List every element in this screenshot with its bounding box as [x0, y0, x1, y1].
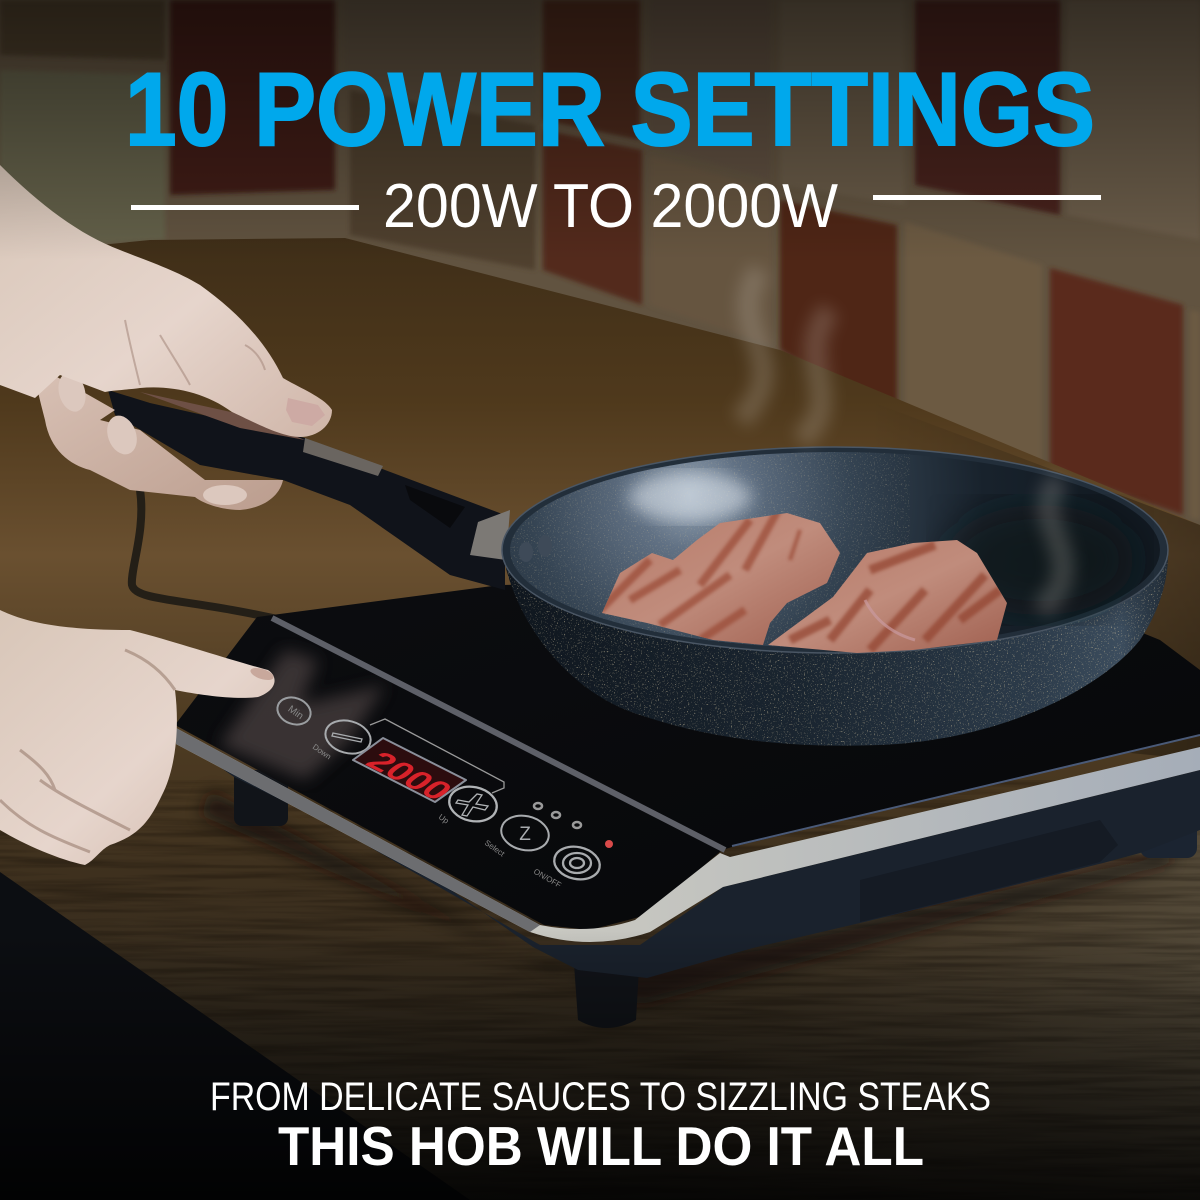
- steam: [740, 270, 1063, 610]
- hob feet: [234, 770, 1197, 1028]
- top shading: [0, 0, 1200, 260]
- pan handle: [108, 390, 510, 590]
- pan rivets: [519, 535, 552, 562]
- on off button: [532, 843, 603, 890]
- pan highlight: [628, 473, 752, 521]
- display bracket: [370, 719, 504, 793]
- up button: Up: [437, 812, 451, 826]
- hob body: [175, 735, 1200, 978]
- right rule: [873, 195, 1101, 200]
- steak pink edge: [865, 600, 915, 640]
- worktop grain: [0, 780, 1200, 1200]
- hob: [175, 575, 1200, 1028]
- title: 10 POWER SETTINGS: [125, 52, 1095, 168]
- left rule: [131, 205, 359, 210]
- indicator lights: [534, 803, 581, 828]
- bottom headline: THIS HOB WILL DO IT ALL: [278, 1115, 924, 1177]
- up button: [437, 782, 500, 826]
- red power display: 2000: [358, 746, 461, 806]
- down button: [311, 716, 374, 761]
- pan interior: [510, 452, 1160, 648]
- pan interior speckles: [510, 450, 910, 650]
- mode button: [274, 693, 314, 729]
- hob silver edge: [176, 728, 1200, 942]
- bottom shading: [0, 930, 1200, 1200]
- hand back and thumb: [0, 165, 332, 437]
- palm under thumb: [140, 392, 305, 440]
- control panel divider: [272, 618, 725, 850]
- lower hand nail: [249, 666, 275, 682]
- pan rim: [502, 447, 1168, 653]
- pan right dark: [945, 505, 1135, 615]
- handle ferrule: [470, 510, 510, 560]
- worktop front edge: [0, 872, 470, 1200]
- hand creases: [125, 320, 265, 385]
- hob blue edge line: [732, 735, 1200, 846]
- on off button: ON/OFF: [532, 867, 563, 890]
- thumb nail: [286, 398, 325, 426]
- select button: Z: [519, 824, 531, 845]
- select button: Select: [483, 838, 507, 859]
- right steak: [768, 540, 1007, 653]
- lower hand knuckle shadows: [0, 650, 175, 852]
- hob body recess: [860, 820, 1118, 922]
- hob glass top: [175, 575, 1200, 930]
- left steak: [600, 510, 840, 645]
- power cable: [132, 490, 290, 622]
- worktop shading right: [600, 300, 1200, 760]
- finger highlights: [54, 369, 247, 505]
- hand fingers: [35, 360, 283, 510]
- hob shadow: [200, 790, 1170, 1005]
- tiled wall background: [0, 0, 1200, 560]
- frying pan: [500, 270, 1170, 750]
- subtitle: 200W TO 2000W: [383, 172, 838, 241]
- control panel reflection: [220, 650, 385, 780]
- select button: [483, 811, 552, 859]
- worktop light area right: [650, 800, 1200, 1200]
- power LED: [605, 840, 613, 848]
- upper hand: [0, 165, 332, 510]
- bottom caption: FROM DELICATE SAUCES TO SIZZLING STEAKS: [210, 1075, 991, 1119]
- down button: Down: [311, 742, 333, 761]
- pan body speckles: [506, 560, 1168, 746]
- handle slot: [405, 485, 465, 528]
- mode button: Min: [286, 704, 305, 722]
- lower hand: [0, 610, 275, 865]
- handle metal inlay: [303, 438, 383, 476]
- hob left edge tone: [176, 728, 540, 932]
- pan outer body: [502, 548, 1168, 746]
- red power display: [353, 738, 466, 806]
